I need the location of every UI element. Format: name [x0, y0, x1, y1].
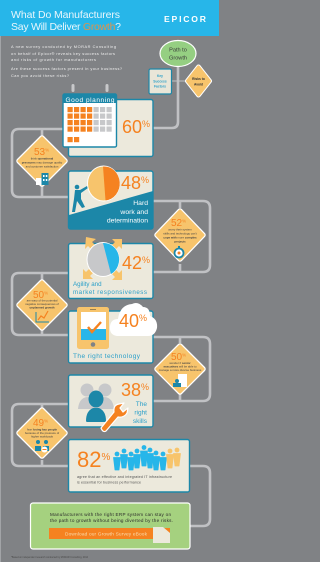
agreement text: agree that an effective and integrated IT infrastructure [77, 475, 172, 479]
48 percent: % [141, 175, 149, 185]
risk diamond: 50 percent right: executives will be able to [163, 364, 197, 368]
skills label: skills [133, 418, 148, 425]
icon: calendar: Good planning [66, 97, 115, 104]
agreement text [77, 475, 172, 484]
risk diamond: 52 percent: % [182, 218, 186, 224]
agility label [73, 281, 147, 296]
intro text: Are these success factors present in your business? [11, 66, 123, 71]
60 percent: 60 [122, 117, 142, 137]
logo: Epicor: EPICOR [164, 14, 207, 24]
hard work label: Hard [133, 200, 148, 207]
key success factors box: Success [153, 80, 167, 84]
risk diamond: 53 percent: and customer satisfaction [26, 164, 59, 168]
icon: executives and building [173, 374, 187, 387]
icon: office building [36, 173, 48, 185]
title: What Do Manufacturers [11, 9, 120, 21]
skills label: The [136, 401, 147, 408]
60 percent: % [142, 119, 150, 129]
conclusion text: the path to growth without being diverted by the risks. [50, 518, 173, 523]
connector path [12, 66, 210, 526]
intro text: A new survey conducted by MORAR Consulting [11, 44, 116, 49]
header band [0, 0, 219, 36]
risk diamond: 50 percent left: 50 [33, 290, 44, 301]
risk diamond: 50 percent left: % [44, 290, 48, 296]
risk diamond: 50 percent left: unplanned growth [29, 306, 55, 310]
risk diamond: 53 percent: think operational [31, 156, 53, 160]
key success factors box [149, 69, 172, 94]
intro text: Can you avoid these risks? [11, 73, 70, 78]
intro text: on behalf of Epicor® reveals key success factors [11, 51, 115, 56]
38 percent: 38 [121, 380, 141, 400]
risks to avoid diamond [188, 67, 210, 95]
risk diamond: 52 percent: skills and technology can't [163, 232, 197, 236]
path to growth oval: Growth [169, 56, 187, 62]
path to growth oval: Path to [169, 48, 187, 54]
conclusion text: Manufacturers with the right ERP system can stay on [50, 512, 171, 517]
risk diamond: 49 percent: higher workloads [31, 434, 53, 438]
card: technology [68, 303, 157, 363]
risk diamond: 53 percent: 53 [34, 147, 45, 158]
intro text [11, 44, 123, 78]
pie chart 48 percent [87, 166, 120, 202]
icon: tablet [77, 307, 109, 349]
teal slope [69, 191, 153, 229]
risk diamond: 49 percent: because of the pressure of [25, 431, 59, 435]
risk diamond: 52 percent: 52 [171, 218, 182, 229]
risk diamond: 50 percent left [19, 282, 65, 328]
icon: people with minus [35, 440, 49, 452]
pie chart 42 percent [86, 242, 120, 277]
82 percent: 82 [77, 447, 101, 472]
hard work label [107, 200, 148, 224]
risk diamond: 53 percent [19, 138, 65, 185]
risk diamond: 50 percent left: negative consequences of [25, 302, 59, 306]
risks to avoid diamond: Avoid [194, 82, 203, 86]
card: hard work [68, 166, 153, 229]
icon: cloud [110, 303, 157, 336]
risk diamond: 50 percent right: wonder if senior [169, 361, 191, 365]
risk diamond: 50 percent left: are wary of the potential [27, 298, 58, 302]
path to growth oval [160, 40, 196, 66]
38 percent: % [141, 382, 149, 392]
key success factors box: Key [157, 74, 163, 78]
icon: wrench [101, 403, 128, 432]
icon: line chart [36, 311, 49, 322]
40 percent: 40 [119, 311, 139, 331]
intro text: and risks of growth for manufacturers [11, 57, 96, 62]
icon: people silhouettes [78, 384, 114, 422]
risk diamond: 49 percent [19, 410, 65, 456]
48 percent: 48 [121, 173, 141, 193]
green conclusion panel [30, 503, 190, 549]
title line 2: Say Will Deliver Growth? [11, 21, 121, 33]
risk diamond: 50 percent right: manage a more diverse business [159, 368, 202, 372]
card: good planning [63, 84, 153, 156]
risk diamond: 49 percent: fear losing key people [27, 428, 57, 432]
icon: stopwatch [174, 246, 184, 258]
agility label: market responsiveness [73, 289, 147, 296]
risk diamond: 49 percent: 49 [33, 418, 44, 429]
technology label: The right technology [73, 353, 141, 360]
82 percent: % [101, 452, 110, 463]
icon: people row [114, 446, 180, 470]
40 percent: % [139, 313, 147, 323]
skills label: right [134, 410, 147, 416]
risk diamond: 52 percent: worry their system [168, 228, 192, 232]
download button [49, 528, 170, 539]
arrows around pie [83, 237, 122, 280]
conclusion text [50, 512, 173, 523]
risk diamond: 53 percent: % [45, 148, 49, 152]
risk diamond: 50 percent right: 50 [171, 352, 182, 363]
risk diamond: 50 percent right [157, 346, 203, 392]
icon: pushing figure [72, 185, 88, 212]
footnote: *Based on independent research conducted by MORAR Consulting, 2014 [11, 556, 89, 559]
risk diamond: 53 percent: pressures may damage quality [22, 160, 63, 164]
download button: Download our Growth Survey eBook [65, 532, 148, 538]
42 percent: 42 [122, 253, 142, 273]
risks to avoid diamond: Risks to [192, 77, 205, 81]
skills label [133, 401, 148, 425]
risk diamond: 52 percent: cope with more complex [163, 236, 197, 240]
risk diamond: 52 percent [157, 211, 203, 259]
42 percent: % [142, 255, 150, 265]
risk diamond: 49 percent: % [44, 418, 48, 424]
card: agility [68, 237, 153, 298]
hard work label: determination [107, 218, 148, 224]
agility label: Agility and [73, 281, 102, 288]
icon: document [153, 527, 170, 543]
agreement text: is essential for business performance [77, 480, 141, 484]
risk diamond: 52 percent: projects [174, 240, 186, 244]
risk diamond: 50 percent right: % [182, 352, 186, 358]
hard work label: work and [119, 209, 148, 216]
key success factors box: Factors [154, 84, 166, 88]
card: 82 percent [68, 440, 190, 492]
card: skills [68, 375, 153, 432]
